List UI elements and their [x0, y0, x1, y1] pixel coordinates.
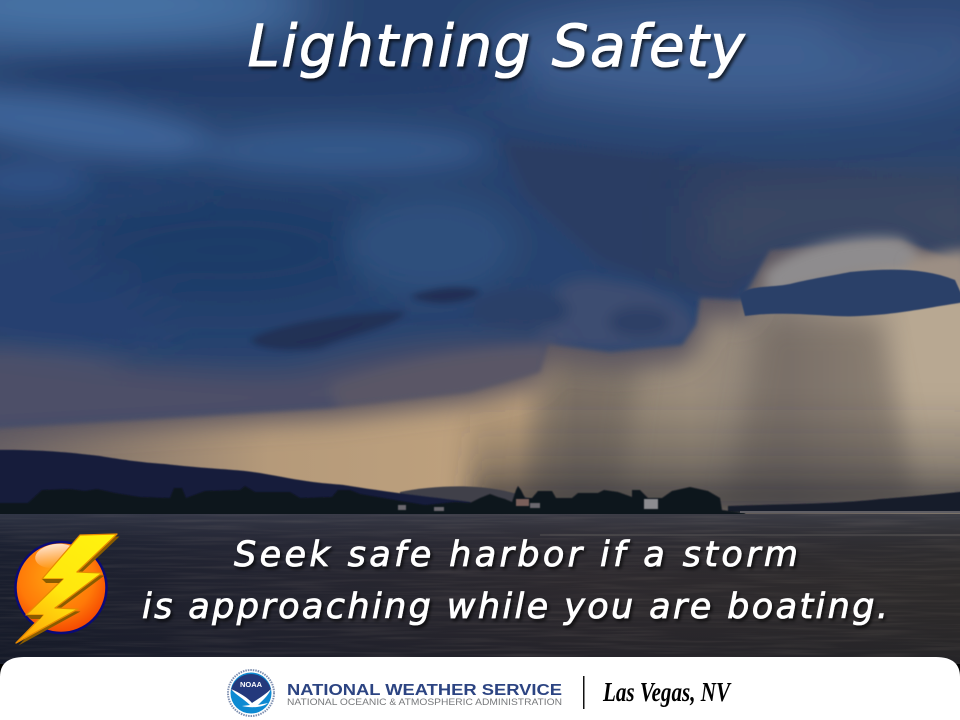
lake water	[0, 511, 960, 664]
lit haze under the cloud	[0, 0, 960, 520]
National Weather Service wordmark: NATIONAL WEATHER SERVICE	[287, 682, 562, 699]
pale opening in the cloud	[765, 237, 960, 298]
dark storm wedge	[510, 145, 755, 294]
right shore	[728, 491, 960, 512]
title: Lightning Safety	[248, 12, 745, 80]
bulge of the shelf cloud	[538, 278, 695, 350]
NOAA logo: NOAA	[240, 680, 263, 689]
icon: lightning bolt on orange orb	[16, 534, 120, 646]
main cloud	[0, 0, 960, 440]
NOAA logo	[228, 670, 274, 716]
small dark cloud	[740, 270, 960, 316]
location label: Las Vegas, NV	[602, 677, 732, 707]
main hill	[0, 450, 480, 516]
storm photo background	[0, 0, 960, 520]
caption	[142, 535, 888, 627]
caption: Seek safe harbor if a storm	[234, 535, 798, 575]
National Weather Service wordmark	[287, 682, 562, 707]
footer panel	[0, 657, 960, 720]
divider	[583, 676, 584, 709]
tree line	[0, 486, 745, 517]
National Weather Service wordmark: NATIONAL OCEANIC & ATMOSPHERIC ADMINISTRATION	[287, 697, 562, 707]
caption: is approaching while you are boating.	[142, 587, 888, 627]
rain shafts	[525, 320, 915, 500]
purple-grey underside	[0, 341, 560, 440]
dark underside patches	[250, 287, 480, 350]
far ridge	[400, 486, 540, 510]
soft transition below cloud	[0, 0, 960, 438]
village buildings	[398, 499, 658, 511]
